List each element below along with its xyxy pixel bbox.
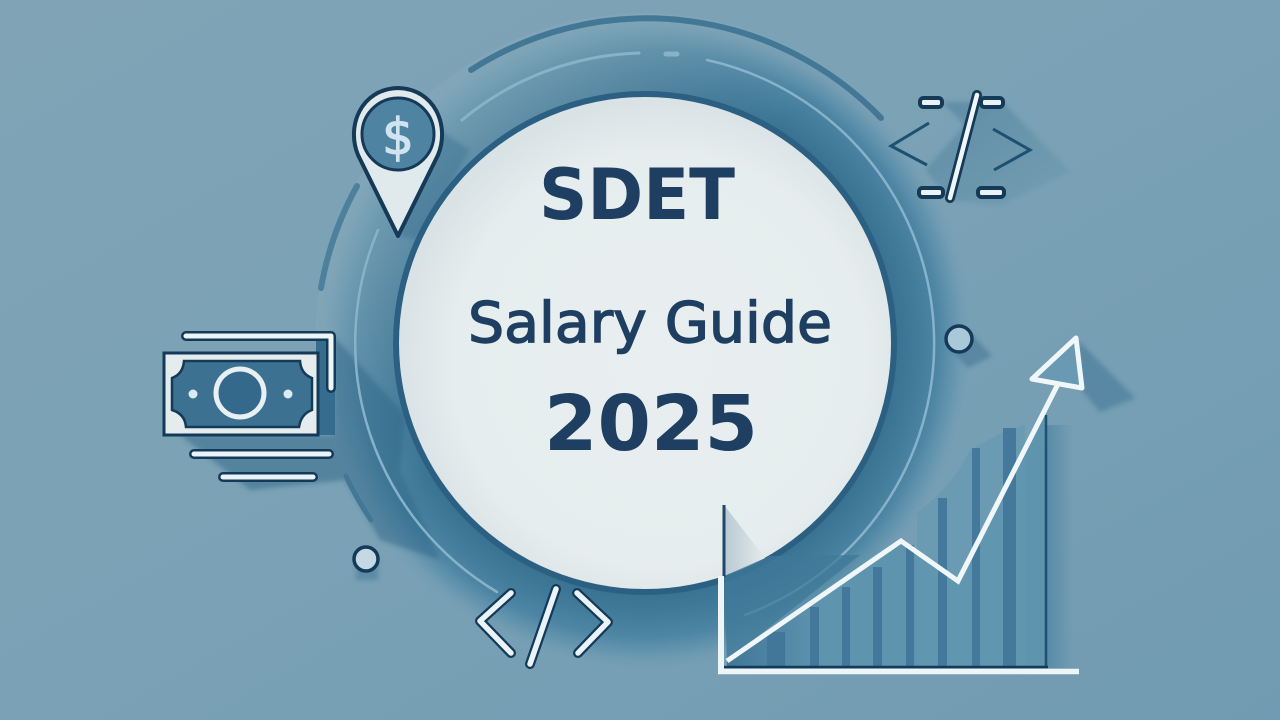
icon: location pin with dollar sign	[354, 88, 442, 236]
front note	[164, 353, 318, 435]
x axis	[718, 669, 1079, 674]
chart: growth bars and trend line	[718, 338, 1135, 672]
area under trend line	[727, 408, 1046, 667]
icon: banknote stack	[164, 336, 335, 477]
icon: code slash with bars, top right	[891, 95, 1070, 205]
ring: blue band around the central circle	[180, 13, 975, 673]
light bars above trend line	[917, 425, 1025, 667]
light inner arcs	[355, 53, 934, 615]
icon: small dot right	[946, 326, 992, 368]
outer arc: left	[321, 186, 357, 288]
back note outline	[186, 336, 331, 388]
trend line	[727, 384, 1058, 661]
heading: SDET: SDET	[539, 154, 735, 236]
heading: 2025: 2025	[544, 380, 758, 469]
baseline dark	[724, 666, 1048, 668]
note underline bars	[194, 449, 329, 459]
icon: small dot left	[354, 547, 378, 580]
arrow head shadow	[1078, 340, 1135, 412]
bars	[767, 428, 1016, 667]
y axis	[722, 505, 726, 577]
axis wedge shadow	[724, 505, 765, 576]
dollar sign: $	[382, 108, 414, 166]
banknote long shadow	[180, 335, 440, 560]
central circle	[393, 91, 897, 595]
outer arc: lower left	[346, 476, 371, 520]
outer arc: top	[471, 18, 881, 118]
pin shadow	[398, 130, 470, 240]
dark area beside axis	[724, 555, 860, 661]
arrow head	[1032, 338, 1082, 388]
right edge shade	[1047, 425, 1073, 668]
back note shade	[316, 340, 335, 435]
chart right edge	[1045, 415, 1047, 668]
icon: code brackets, bottom	[480, 589, 608, 664]
heading: Salary Guide: Salary Guide	[468, 291, 832, 356]
